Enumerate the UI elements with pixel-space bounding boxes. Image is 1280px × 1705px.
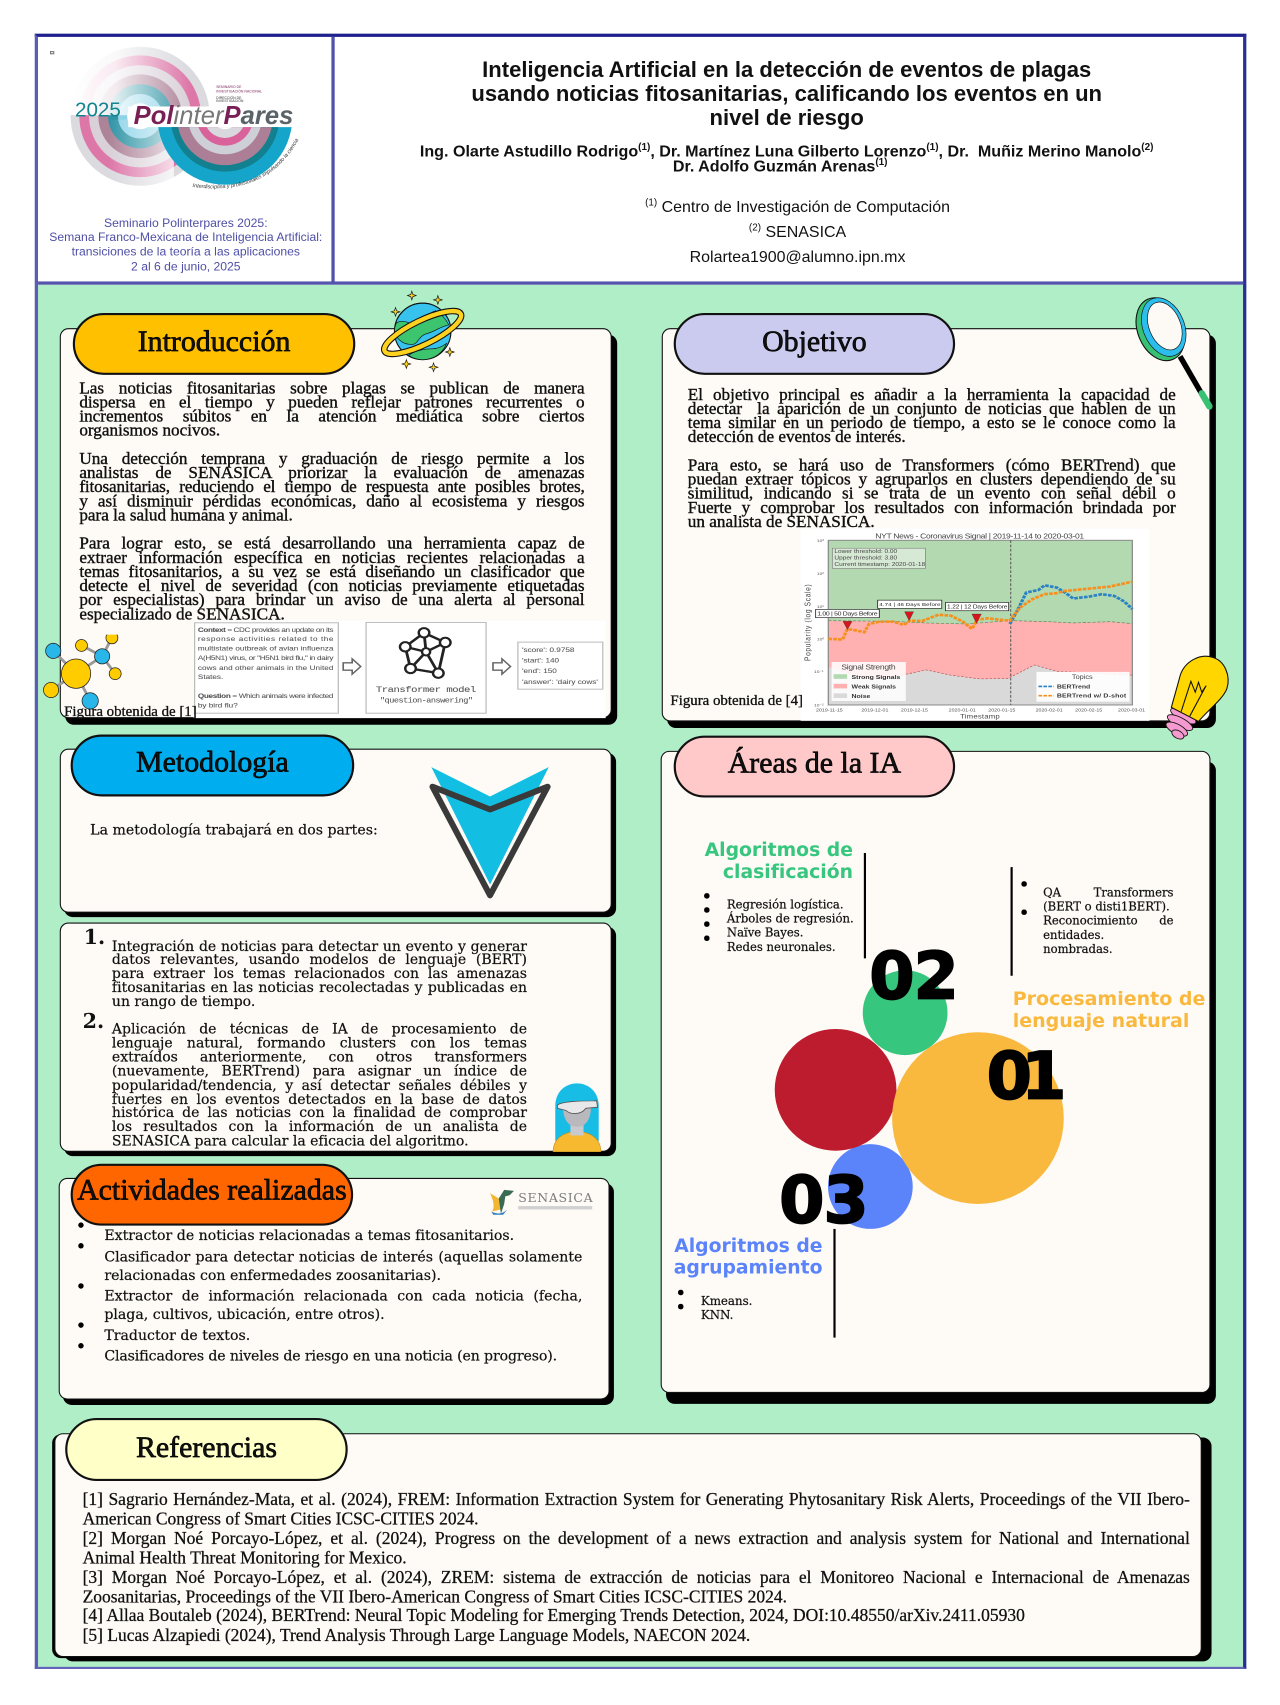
- chart: NYT News Coronavirus Signal: 10³: [816, 538, 824, 542]
- figure: question answering pipeline: cows and other animals in the United: [198, 663, 334, 671]
- chart: NYT News Coronavirus Signal: 10⁻¹: [813, 669, 824, 674]
- chart: NYT News Coronavirus Signal: Timestamp: [960, 714, 999, 720]
- authors: Ing. Olarte Astudillo Rodrigo(1), Dr. Martínez Luna Gilberto Lorenzo(1), Dr. Muñiz Merino Manolo(2): [420, 141, 1153, 160]
- chart: NYT News Coronavirus Signal: [800, 529, 1150, 721]
- classification list: Redes neuronales.: [727, 940, 836, 954]
- objective text: similitud, indicando si se trata de un evento con señal débil o: [688, 485, 1176, 503]
- step 2 text: (nuevamente, BERTrend) para asignar un índice de: [112, 1063, 527, 1080]
- heading: Referencias: [65, 1418, 348, 1481]
- intro text: y así disminuir pérdidas económicas, daño al ecosistema y riesgos: [79, 492, 585, 511]
- objective text: Para esto, se hará uso de Transformers (cómo BERTrend) que: [688, 456, 1176, 475]
- heading: Actividades realizadas: Actividades realizadas: [77, 1172, 347, 1206]
- panel box: [661, 751, 1210, 1393]
- heading: Metodología: [71, 735, 354, 796]
- number 03: 03: [779, 1163, 868, 1239]
- clustering list: KNN.: [701, 1308, 733, 1322]
- header band: [38, 37, 1243, 285]
- chart: NYT News Coronavirus Signal: 2019-11-15: [816, 707, 843, 713]
- header divider: [331, 37, 335, 283]
- intro text: temas fitosanitarios, a su vez se está diseñando un clasificador que: [79, 563, 585, 581]
- figure: question answering pipeline: 'end': 150: [522, 666, 557, 675]
- classification list: [704, 893, 854, 954]
- intro text: para la salud humana y animal.: [79, 506, 293, 525]
- panel: methodology steps: [60, 922, 616, 1156]
- intro text: especializado de SENASICA.: [79, 605, 285, 624]
- activity list: Extractor de información relacionada con cada noticia (fecha,: [104, 1289, 582, 1305]
- reference list: [5] Lucas Alzapiedi (2024), Trend Analysis Through Large Language Models, NAECON 2024.: [83, 1627, 750, 1645]
- reference list: Animal Health Threat Monitoring for Mexico.: [83, 1549, 407, 1568]
- step 2 text: popularidad/tendencia, y así detectar señales débiles y: [112, 1077, 527, 1094]
- chart: NYT News Coronavirus Signal: Signal Strength: [841, 663, 895, 671]
- step 2 text: histórica de las noticias con la finalidad de comprobar: [112, 1106, 527, 1122]
- NLP list: (BERT o disti1BERT).: [1043, 899, 1170, 913]
- icon: SENASICA logo: SENASICA: [518, 1190, 593, 1205]
- heading: Áreas de la IA: Áreas de la IA: [728, 745, 901, 779]
- classification list: Naïve Bayes.: [727, 926, 803, 940]
- chart: NYT News Coronavirus Signal: Weak Signals: [851, 683, 896, 690]
- caption: Figura obtenida de [4]: [670, 692, 803, 708]
- title: usando noticias fitosanitarias, calificando los eventos en un: [471, 83, 1102, 106]
- objective text: detección de eventos de interés.: [688, 428, 906, 447]
- step 2 text: Aplicación de técnicas de IA de procesamiento de: [112, 1021, 527, 1038]
- chart: NYT News Coronavirus Signal: BERTrend: [1056, 683, 1090, 690]
- figure: question answering pipeline: "question-answering": [380, 697, 473, 705]
- panel box: [59, 1178, 610, 1400]
- heading: Referencias: Referencias: [136, 1430, 277, 1464]
- step 2 text: [112, 1021, 528, 1150]
- affiliations: [645, 196, 950, 266]
- chart: NYT News Coronavirus Signal: 10¹: [816, 604, 824, 608]
- affiliations: Rolartea1900@alumno.ipn.mx: [690, 248, 905, 266]
- activity bullets: [78, 1222, 84, 1348]
- intro text: [79, 379, 585, 624]
- panel box: [60, 923, 612, 1152]
- chart: NYT News Coronavirus Signal: Current timestamp: 2020-01-18: [834, 562, 925, 567]
- chart: NYT News Coronavirus Signal: 2020-02-15: [1075, 707, 1102, 713]
- caption: Figura obtenida de [1]: [64, 703, 197, 719]
- chart: NYT News Coronavirus Signal: Popularity (log Scale): [803, 584, 812, 660]
- figure: question answering pipeline: [194, 620, 606, 718]
- divider line agrupamiento: [833, 1229, 835, 1338]
- heading: Procesamiento de lenguaje natural: Procesamiento de: [1013, 989, 1205, 1011]
- figure: question answering pipeline: Question = Which animals were infected: [198, 692, 334, 700]
- heading: Algoritmos de clasificación: clasificación: [723, 862, 853, 884]
- seminar text: [49, 217, 322, 274]
- figure: question answering pipeline: multistate outbreak of avian influenza: [198, 644, 335, 652]
- number 02: 02: [869, 939, 958, 1015]
- chart: NYT News Coronavirus Signal: 2020-01-15: [988, 707, 1015, 713]
- step 2 text: lenguaje natural, formando clusters con los temas: [112, 1035, 527, 1052]
- chart: NYT News Coronavirus Signal: 2019-12-15: [900, 707, 928, 713]
- chart: NYT News Coronavirus Signal: Upper threshold: 3.80: [834, 555, 897, 561]
- panel: Actividades realizadas: [58, 1164, 614, 1405]
- step 2 text: extraídos anteriormente, con otros transformers: [112, 1049, 527, 1066]
- step 2 text: fuertes en los eventos detectados en la base de datos: [112, 1092, 527, 1108]
- activity list: Clasificadores de niveles de riesgo en una noticia (en progreso).: [104, 1348, 557, 1365]
- chart: NYT News Coronavirus Signal: 2020-01-01: [948, 707, 976, 713]
- logo: PolinterPares 2025: [70, 47, 298, 190]
- chart: NYT News Coronavirus Signal: 10⁻²: [813, 702, 824, 707]
- intro text: por especialistas) para brindar un aviso de una alerta al personal: [79, 591, 585, 610]
- icon: SENASICA logo: [490, 1190, 593, 1215]
- panel box: [662, 328, 1210, 721]
- intro text: analistas de SENASICA priorizar la evaluación de amenazas: [79, 464, 585, 482]
- title: Inteligencia Artificial en la detección de eventos de plagas: [482, 59, 1091, 83]
- intro text: organismos nocivos.: [79, 422, 220, 440]
- figure: question answering pipeline: response activities related to the: [198, 634, 334, 642]
- icon: molecule: [43, 634, 122, 710]
- panel: Objetivo: [662, 297, 1229, 740]
- chart: NYT News Coronavirus Signal: 2020-03-01: [1118, 707, 1145, 713]
- reference list: [3] Morgan Noé Porcayo-López, et al. (2024), ZREM: sistema de extracción de noticias para el Monitoreo Nacional e Internacional de Amenazas: [83, 1569, 1190, 1587]
- heading: Algoritmos de clasificación: Algoritmos de: [705, 840, 853, 862]
- heading: Algoritmos de clasificación: [704, 840, 853, 884]
- logo: PolinterPares 2025: INVESTIGACIÓN: [216, 98, 244, 103]
- figure: question answering pipeline: Context = CDC provides an update on its: [198, 625, 334, 633]
- step number 2: 2.: [83, 1009, 104, 1033]
- chart: NYT News Coronavirus Signal: 4.74 | 46 Days Before: [879, 602, 940, 607]
- objective text: detectar la aparición de un conjunto de noticias que hablen de un: [688, 400, 1176, 418]
- chart: NYT News Coronavirus Signal: NYT News - Coronavirus Signal | 2019-11-14 to 2020-03-01: [875, 532, 1084, 540]
- logo: PolinterPares 2025: Interdisciplina y profesionales impulsando la ciencia: [192, 138, 298, 190]
- icon: downward arrow: [429, 767, 551, 898]
- logo: PolinterPares 2025: DIRECCIÓN DE: [216, 95, 242, 100]
- step 1 text: [112, 938, 528, 1011]
- seminar text: 2 al 6 de junio, 2025: [131, 260, 241, 274]
- chart: NYT News Coronavirus Signal: Noise: [851, 693, 870, 699]
- chart: NYT News Coronavirus Signal: 2019-12-01: [861, 707, 888, 713]
- intro text: Las noticias fitosanitarias sobre plagas se publican de manera: [79, 379, 585, 398]
- step 1 text: para extraer los temas relacionados con las amenazas: [112, 966, 527, 983]
- intro sentence: La metodología trabajará en dos partes:: [90, 823, 378, 839]
- heading: Algoritmos de agrupamiento: [674, 1235, 823, 1279]
- logo: PolinterPares 2025: 2025: [75, 98, 121, 121]
- NLP list: nombradas.: [1043, 942, 1113, 956]
- circle diagram: [774, 970, 1064, 1229]
- number 01: 01: [987, 1039, 1056, 1115]
- logo: PolinterPares 2025: PolinterPares: [134, 102, 293, 130]
- step 1 text: datos relevantes, usando modelos de lenguaje (BERT): [112, 952, 527, 969]
- title: [471, 59, 1102, 130]
- figure: question answering pipeline: 'answer': 'dairy cows': [522, 677, 599, 686]
- heading: Actividades realizadas: [71, 1164, 353, 1226]
- reference list: Zoosanitarias, Proceedings of the VII Ibero-American Congress of Smart Cities ICSC-CITIES 2024.: [83, 1588, 787, 1607]
- objective text: tema similar en un periodo de tiempo, a esto se le conoce como la: [688, 414, 1176, 432]
- reference list: [82, 1491, 1190, 1646]
- intro text: fitosanitarias, reduciendo el tiempo de respuesta ante posibles brotes,: [79, 478, 585, 497]
- reference list: [1] Sagrario Hernández-Mata, et al. (2024), FREM: Information Extraction System for Generating Phytosanitary Risk Alerts, Proceedings of the VII Ibero-: [83, 1491, 1190, 1509]
- panel box: [60, 749, 612, 913]
- figure: question answering pipeline: 'start': 140: [522, 656, 559, 664]
- affiliations: (2) SENASICA: [749, 221, 846, 241]
- activity list: Traductor de textos.: [104, 1328, 250, 1344]
- chart: NYT News Coronavirus Signal: 2020-02-01: [1035, 707, 1062, 713]
- intro text: Una detección temprana y graduación de riesgo permite a los: [79, 450, 585, 468]
- step 2 text: los resultados con la información de un analista de: [112, 1120, 527, 1136]
- clustering list: [678, 1290, 752, 1322]
- icon: magnifying glass: [1135, 297, 1213, 410]
- chart: NYT News Coronavirus Signal: 10²: [816, 571, 824, 575]
- seminar text: transiciones de la teoría a las aplicaciones: [72, 246, 300, 259]
- heading: Objetivo: Objetivo: [762, 324, 867, 357]
- icon: light bulb: [1166, 656, 1229, 740]
- panel box: [60, 328, 612, 718]
- intro text: incrementos súbitos en la atención mediática sobre ciertos: [79, 407, 585, 426]
- activity list: Extractor de noticias relacionadas a temas fitosanitarios.: [104, 1228, 514, 1244]
- NLP list: QA Transformers: [1043, 885, 1174, 899]
- seminar text: Semana Franco-Mexicana de Inteligencia Artificial:: [49, 231, 322, 244]
- chart: NYT News Coronavirus Signal: 1.00 | 50 Days Before: [817, 610, 878, 617]
- classification list: Regresión logística.: [727, 898, 844, 912]
- step 1 text: un rango de tiempo.: [112, 994, 255, 1011]
- figure: question answering pipeline: A(H5N1) virus, or "H5N1 bird flu," in dairy: [198, 653, 334, 662]
- activity list: Clasificador para detectar noticias de interés (aquellas solamente: [104, 1250, 582, 1266]
- heading: Introducción: [73, 313, 355, 375]
- step 2 text: SENASICA para calcular la eficacia del algoritmo.: [112, 1134, 469, 1150]
- activity list: [104, 1228, 582, 1365]
- figure: question answering pipeline: 'score': 0.9758: [522, 645, 575, 653]
- objective text: Fuerte y comprobar los resultados con información brindada por: [688, 499, 1176, 517]
- reference list: [4] Allaa Boutaleb (2024), BERTrend: Neural Topic Modeling for Emerging Trends Detection, 2024, DOI:10.48550/arXiv.2411.05930: [83, 1608, 1025, 1626]
- intro text: dispersa en el tiempo y pueden reflejar patrones recurrentes o: [79, 393, 585, 412]
- chart: NYT News Coronavirus Signal: Lower threshold: 0.00: [834, 549, 897, 554]
- small marker: [50, 51, 54, 54]
- step 1 text: fitosanitarias en las noticias recolectadas y publicadas en: [112, 980, 527, 997]
- objective text: [688, 386, 1176, 531]
- chart: NYT News Coronavirus Signal: BERTrend w/ D-shot: [1056, 693, 1127, 699]
- chart: NYT News Coronavirus Signal: 1.22 | 12 Days Before: [947, 604, 1008, 610]
- NLP list: Reconocimiento de: [1043, 913, 1174, 927]
- intro text: detecte el nivel de severidad (con noticias previamente etiquetadas: [79, 577, 585, 595]
- heading: Algoritmos de agrupamiento: Algoritmos de: [674, 1235, 823, 1257]
- heading: Áreas de la IA: [674, 736, 955, 798]
- activity list: relacionadas con enfermedades zoosanitarias).: [104, 1268, 441, 1284]
- divider line clasificación: [863, 853, 865, 958]
- objective text: un analista de SENASICA.: [688, 513, 875, 531]
- panel: Introducción: [43, 290, 618, 725]
- panel box: [54, 1433, 1202, 1657]
- clustering list: Kmeans.: [701, 1294, 752, 1308]
- title: nivel de riesgo: [710, 106, 864, 130]
- step number 1: 1.: [84, 926, 105, 950]
- objective text: El objetivo principal es añadir a la herramienta la capacidad de: [688, 386, 1176, 404]
- objective text: puedan extraer tópicos y agruparlos en clusters dependiendo de su: [688, 470, 1176, 489]
- heading: Algoritmos de agrupamiento: agrupamiento: [674, 1257, 823, 1279]
- intro text: Para lograr esto, se está desarrollando una herramienta capaz de: [79, 535, 585, 553]
- chart: NYT News Coronavirus Signal: Strong Signals: [851, 674, 900, 680]
- figure: question answering pipeline: by bird flu?: [198, 701, 238, 709]
- classification list: Árboles de regresión.: [727, 912, 854, 926]
- panel: Metodología header: [60, 734, 616, 918]
- authors: Dr. Adolfo Guzmán Arenas(1): [673, 157, 888, 176]
- heading: Objetivo: [674, 313, 955, 375]
- NLP list: [1021, 881, 1174, 956]
- step 1 text: Integración de noticias para detectar un evento y generar: [112, 938, 527, 955]
- authors: [420, 141, 1153, 176]
- activity list: plaga, cultivos, ubicación, entre otros).: [104, 1307, 385, 1323]
- chart: NYT News Coronavirus Signal: Topics: [1071, 674, 1093, 680]
- reference list: [2] Morgan Noé Porcayo-López, et al. (2024), Progress on the development of a news extraction and analysis system for National and International: [83, 1530, 1190, 1548]
- heading: Procesamiento de lenguaje natural: lenguaje natural: [1013, 1011, 1189, 1032]
- figure: question answering pipeline: States.: [198, 672, 224, 681]
- figure: question answering pipeline: Transformer model: [376, 685, 477, 694]
- heading: Procesamiento de lenguaje natural: [1013, 989, 1205, 1032]
- heading: Metodología: Metodología: [136, 744, 289, 778]
- affiliations: (1) Centro de Investigación de Computación: [645, 196, 950, 216]
- reference list: American Congress of Smart Cities ICSC-CITIES 2024.: [83, 1510, 478, 1529]
- seminar text: Seminario Polinterpares 2025:: [104, 217, 268, 230]
- icon: woman with glasses: [552, 1083, 602, 1152]
- divider line PLN: [1010, 867, 1012, 976]
- icon: planet: [380, 290, 464, 372]
- logo: PolinterPares 2025: INVESTIGACIÓN NACIONAL: [216, 88, 262, 93]
- NLP list: entidades.: [1043, 927, 1104, 942]
- panel: Referencias: [52, 1418, 1212, 1662]
- intro text: extraer información específica en noticias recientes relacionadas a: [79, 549, 585, 567]
- heading: Introducción: Introducción: [138, 324, 290, 357]
- chart: NYT News Coronavirus Signal: 10⁰: [816, 636, 824, 641]
- panel: Áreas de la IA: [660, 736, 1216, 1404]
- logo: PolinterPares 2025: SEMINARIO DE: [216, 85, 242, 89]
